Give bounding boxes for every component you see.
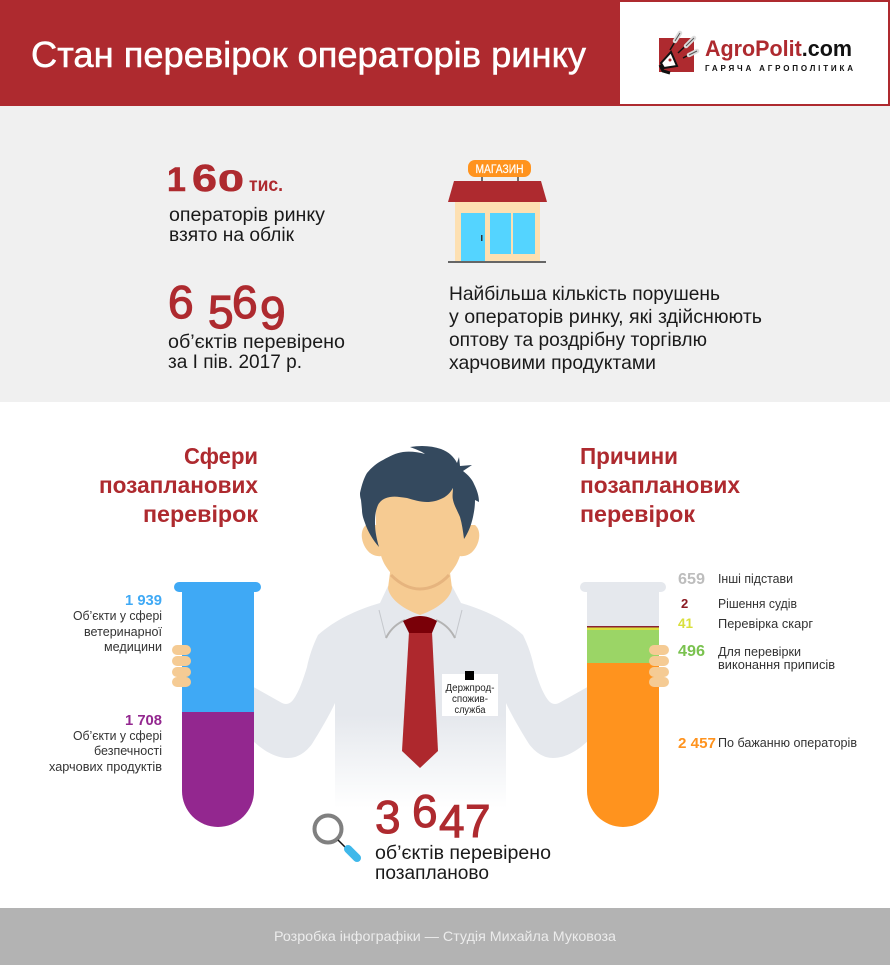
right test tube chart (580, 582, 669, 827)
heading: spheres: Сфери (184, 443, 258, 469)
icon: megaphone with wheat (659, 32, 698, 73)
labels: reasons: 2 457 (678, 735, 716, 752)
labels: spheres: безпечності (94, 743, 162, 758)
labels: spheres: харчових продуктів (49, 759, 162, 774)
labels: reasons: 2 (681, 596, 688, 611)
hair (360, 446, 479, 547)
heading: reasons: перевірок (580, 501, 695, 527)
heading: spheres (99, 443, 258, 527)
labels: spheres (49, 592, 162, 774)
panel: summary (0, 106, 890, 402)
footer (0, 908, 890, 965)
heading: reasons: Причини (580, 443, 678, 469)
left test tube chart (172, 582, 261, 827)
heading: spheres: перевірок (143, 501, 258, 527)
neck shadow (391, 575, 449, 589)
stat: 3 647 unscheduled: 3 647 (375, 785, 491, 847)
text: largest number of violations: оптову та роздрібну торгівлю (449, 329, 707, 351)
labels: spheres: ветеринарної (84, 624, 162, 639)
stat: 3 647 unscheduled: об’єктів перевірено (375, 843, 551, 864)
header band (0, 0, 890, 106)
stat: 6 569 objects (168, 276, 345, 373)
logo panel (620, 2, 888, 104)
labels: spheres: Об’єкти у сфері (73, 728, 162, 743)
icon: shop: МАГАЗИН (476, 164, 524, 176)
labels: spheres: 1 708 (125, 712, 162, 729)
labels: reasons: виконання приписів (718, 657, 835, 672)
title: Стан перевірок операторів ринку (31, 34, 586, 75)
right hand fingers (649, 645, 669, 687)
ears (362, 525, 382, 556)
icon: magnifier (314, 816, 357, 858)
text: largest number of violations: у операторів ринку, які здійснюють (449, 306, 762, 328)
stat: 160 thousand operators (167, 158, 326, 246)
labels: reasons: Рішення судів (718, 596, 797, 611)
stat: 6 569 objects: 6 569 (168, 276, 286, 339)
labels: spheres: Об’єкти у сфері (73, 608, 162, 623)
labels: reasons: По бажанню операторів (718, 735, 857, 750)
labels: reasons: 496 (678, 643, 705, 660)
stat: 160 thousand operators: 1 (167, 161, 186, 199)
labels: spheres: медицини (104, 639, 162, 654)
stat: 160 thousand operators: 0 (218, 165, 244, 198)
labels: reasons: Перевірка скарг (718, 616, 813, 631)
footer: Розробка інфографіки — Студія Михайла Муковоза (274, 928, 616, 944)
labels: reasons: 659 (678, 571, 705, 588)
stat: 6 569 objects: за І пів. 2017 р. (168, 352, 302, 373)
logo wordmark: AgroPolit.com (705, 36, 852, 61)
logo tagline: ГАРЯЧА АГРОПОЛІТИКА (705, 64, 853, 73)
shirt (335, 700, 506, 808)
stat: 6 569 objects: об’єктів перевірено (168, 332, 345, 353)
stat: 160 thousand operators: тис. (249, 175, 283, 196)
heading: reasons (580, 443, 740, 527)
name badge: Держпрод- (446, 683, 494, 694)
stat: 160 thousand operators: операторів ринку (169, 205, 326, 226)
text: largest number of violations: харчовими продуктами (449, 352, 656, 374)
labels: reasons: 41 (678, 615, 693, 631)
figure: inspector (250, 446, 591, 808)
heading: reasons: позапланових (580, 472, 740, 498)
labels: reasons: Для перевірки (718, 644, 801, 659)
labels: reasons: Інші підстави (718, 571, 793, 586)
stat: 160 thousand operators: взято на облік (169, 225, 295, 246)
text: largest number of violations (449, 283, 762, 374)
tie (402, 616, 438, 768)
labels: spheres: 1 939 (125, 592, 162, 609)
labels: reasons (678, 571, 857, 752)
left hand fingers (172, 645, 191, 687)
neck (388, 565, 452, 615)
stat: 160 thousand operators: 6 (192, 158, 217, 200)
face (376, 485, 465, 589)
collar (379, 610, 462, 638)
text: largest number of violations: Найбільша кількість порушень (449, 283, 720, 305)
stat: 3 647 unscheduled: позапланово (375, 863, 489, 884)
heading: spheres: позапланових (99, 472, 258, 498)
name badge (442, 671, 498, 716)
icon: shop (448, 160, 547, 263)
stat: 3 647 unscheduled (375, 785, 551, 884)
name badge: служба (454, 704, 486, 716)
name badge: спожив- (452, 694, 488, 705)
